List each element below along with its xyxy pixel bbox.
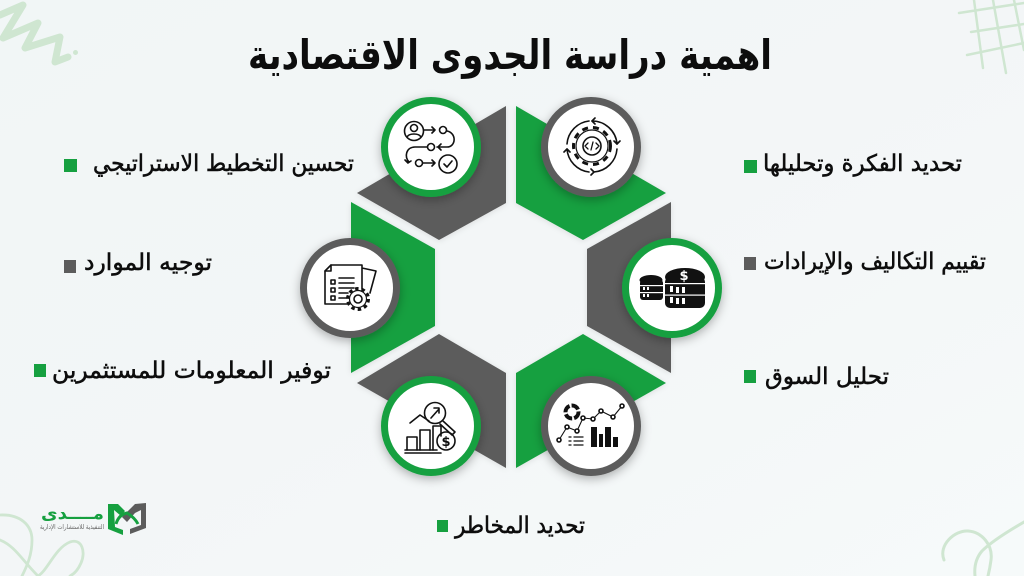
icon circle: analytics and magnifier: $: [441, 435, 451, 450]
logo mark: [108, 503, 146, 535]
icon circle: gear and code: [544, 100, 638, 194]
icon circle: analytics and magnifier: [384, 380, 478, 472]
decoration: bottom-left curves: [0, 515, 83, 576]
icon circle: coins: $: [679, 269, 689, 284]
icon circle: charts: [544, 380, 638, 472]
icon circle: coins: [626, 242, 718, 334]
label: risks: تحديد المخاطر: [454, 513, 585, 539]
label: investor information: توفير المعلومات للمستثمرين: [52, 358, 331, 384]
decoration: top-left scribble: [0, 5, 78, 62]
label: idea definition: تحديد الفكرة وتحليلها: [763, 151, 962, 177]
logo name: مــــدى: [41, 504, 104, 524]
logo: [40, 503, 146, 535]
label: costs and revenues: تقييم التكاليف والإيرادات: [764, 249, 986, 275]
label: directing resources: توجيه الموارد: [84, 250, 212, 276]
segment: right gray: [587, 202, 671, 373]
icon circle: planning flow: [384, 100, 478, 194]
logo tagline: التنفيذية للاستشارات الإدارية: [40, 523, 104, 531]
decoration: top-right grid: [959, 0, 1024, 73]
segment: top left gray: [357, 106, 506, 240]
decoration: bottom-right curves: [943, 522, 1024, 576]
label: strategic planning: تحسين التخطيط الاستراتيجي: [93, 151, 354, 177]
label: market analysis: تحليل السوق: [765, 364, 889, 390]
segment: top right green: [516, 106, 666, 240]
segment: bottom left gray: [357, 334, 506, 468]
hexagon ring: [351, 106, 671, 468]
title: اهمية دراسة الجدوى الاقتصادية: [248, 31, 772, 80]
segment: bottom right green: [516, 334, 666, 468]
icon circle: documents and gear: [304, 242, 396, 334]
segment: left green: [351, 202, 435, 373]
